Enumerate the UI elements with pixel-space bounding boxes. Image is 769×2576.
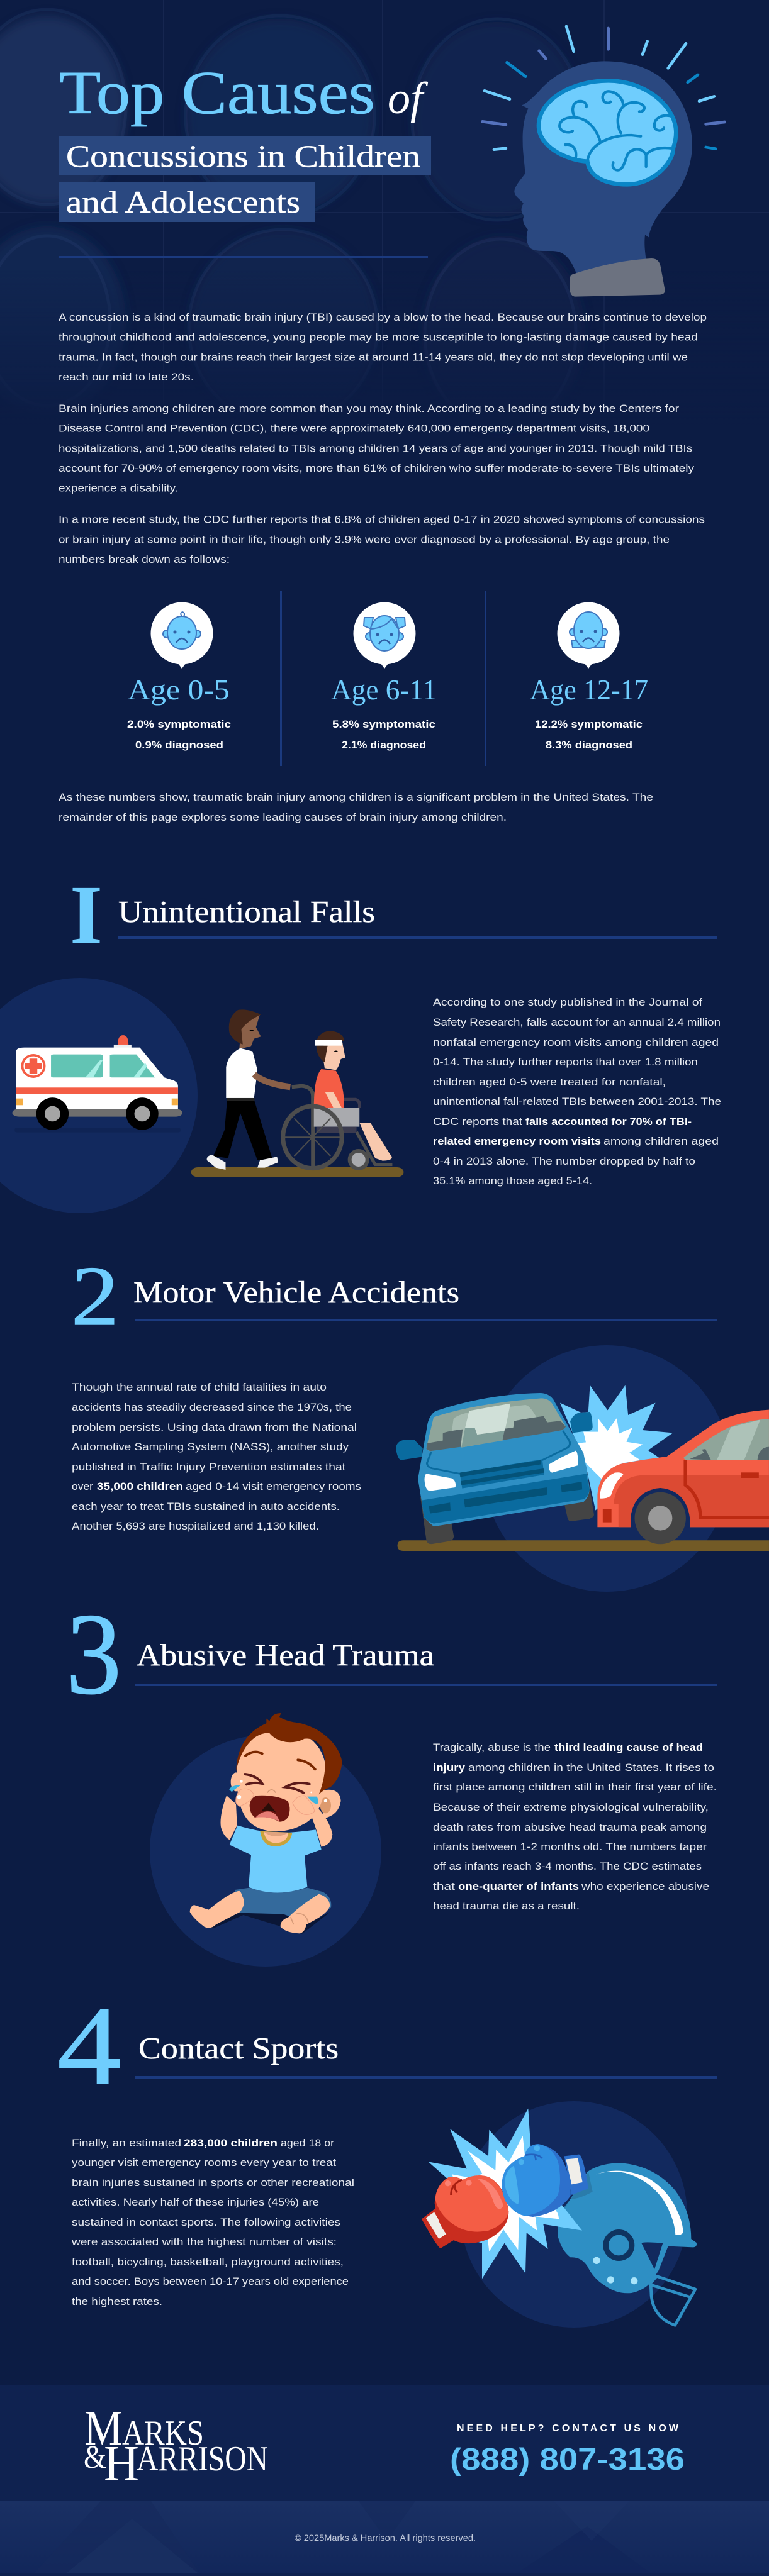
- section 4 text: younger visit emergency rooms every year to treat: [72, 2157, 336, 2168]
- section 4 text: 283,000 children: [184, 2138, 278, 2149]
- impact star: [560, 1385, 673, 1511]
- intro paragraph 1: A concussion is a kind of traumatic brain injury (TBI) caused by a blow to the head. Because our brains continue to develop: [59, 312, 707, 323]
- title: of: of: [388, 73, 429, 123]
- background circle: baby: [150, 1735, 381, 1967]
- hair: [236, 1713, 342, 1794]
- stats panel: age groups: [127, 591, 648, 766]
- helmet: [558, 2163, 697, 2325]
- intro paragraph 3: numbers break down as follows:: [59, 554, 230, 565]
- stat: age 12-17: 8.3% diagnosed: [546, 740, 632, 751]
- section 4 text: football, bicycling, basketball, playground activities,: [72, 2257, 344, 2268]
- ground: [191, 1167, 403, 1177]
- red glove: [422, 2175, 508, 2248]
- illustration: helmet and boxing gloves: [422, 2109, 697, 2325]
- section 2 text: published in Traffic Injury Prevention estimates that: [72, 1462, 345, 1473]
- section 1 text: falls accounted for 70% of TBI-: [525, 1116, 692, 1128]
- section 2 heading: motor vehicle accidents: [71, 1250, 717, 1343]
- man: [207, 1009, 290, 1170]
- intro paragraph 3: [59, 514, 705, 565]
- section 4 text: [71, 2138, 354, 2307]
- section 4 text: aged 18 or: [281, 2138, 335, 2149]
- section 1 text: 0-14. The study further reports that over 1.8 million: [433, 1057, 698, 1068]
- intro paragraph 1: throughout childhood and adolescence, young people may be more susceptible to long-lasting damage caused by head: [59, 332, 698, 343]
- section 4 heading: contact sports: 4: [57, 1983, 121, 2108]
- section 3 text: third leading cause of head: [554, 1742, 703, 1753]
- section 2 text: Another 5,693 are hospitalized and 1,130 killed.: [72, 1521, 319, 1532]
- section 3 text: injury: [433, 1762, 466, 1774]
- shirt: [230, 1826, 322, 1892]
- section 2 text: Though the annual rate of child fatalities in auto: [72, 1382, 327, 1393]
- section 2 text: each year to treat TBIs sustained in auto accidents.: [72, 1501, 340, 1513]
- illustration: car crash: [396, 1385, 769, 1551]
- section 3 text: infants between 1-2 months old. The numbers taper: [433, 1841, 707, 1853]
- transition paragraph: As these numbers show, traumatic brain injury among children is a significant problem in the United States. The: [59, 792, 653, 803]
- section 1 text: among children aged: [603, 1136, 719, 1147]
- section 1 text: children aged 0-5 were treated for nonfatal,: [433, 1077, 666, 1088]
- footer: contact band: [0, 2385, 769, 2501]
- intro paragraph 2: [59, 403, 695, 494]
- background circle: falls: [0, 978, 198, 1213]
- section 1 text: nonfatal emergency room visits among children aged: [433, 1037, 719, 1048]
- head silhouette: [514, 61, 692, 275]
- intro paragraph 2: Disease Control and Prevention (CDC), there were approximately 640,000 emergency department visits, 18,000: [59, 423, 649, 435]
- logo: marks and harrison: M: [84, 2401, 123, 2456]
- stat: age 12-17: 12.2% symptomatic: [535, 719, 643, 730]
- section 3 text: [433, 1742, 717, 1912]
- stat: age 6-11: 2.1% diagnosed: [342, 740, 426, 751]
- hands: [236, 1789, 315, 1814]
- section 4 text: sustained in contact sports. The following activities: [72, 2217, 340, 2228]
- stat: age 12-17: [530, 602, 648, 751]
- icon: teen face: [558, 602, 619, 669]
- section 1 text: unintentional fall-related TBIs between 2001-2013. The: [433, 1096, 721, 1108]
- section 4 text: the highest rates.: [72, 2296, 162, 2307]
- section 2 text: Automotive Sampling System (NASS), another study: [72, 1441, 349, 1453]
- title block: [59, 59, 431, 222]
- illustration: crying baby: [190, 1713, 342, 1934]
- section 4 text: and soccer. Boys between 10-17 years old experience: [72, 2276, 349, 2287]
- section 2 text: problem persists. Using data drawn from the National: [72, 1422, 357, 1433]
- stat: age 6-11: 5.8% symptomatic: [332, 719, 435, 730]
- intro paragraph 2: Brain injuries among children are more common than you may think. According to a leading study by the Centers for: [59, 403, 680, 414]
- rays: [483, 26, 725, 150]
- section 1 text: [433, 997, 721, 1187]
- title box line 2: and Adolescents: [66, 184, 300, 219]
- section 3 text: among children in the United States. It rises to: [468, 1762, 714, 1774]
- stat: age 12-17: Age 12-17: [530, 674, 648, 706]
- tears: [229, 1785, 318, 1804]
- section 2 text: accidents has steadily decreased since the 1970s, the: [72, 1402, 352, 1413]
- title box line 1: Concussions in Children: [66, 138, 420, 174]
- ears: [231, 1772, 241, 1791]
- stat: age 6-11: Age 6-11: [331, 674, 437, 706]
- section 1 heading: unintentional falls: Unintentional Falls: [118, 894, 375, 929]
- logo: marks and harrison: ARRISON: [137, 2440, 268, 2479]
- section 2 text: [72, 1382, 361, 1532]
- illustration: ambulance: [12, 1035, 182, 1133]
- section 4 text: activities. Nearly half of these injuries (45%) are: [72, 2197, 319, 2208]
- section 3 text: who experience abusive: [581, 1881, 709, 1892]
- intro paragraph 3: In a more recent study, the CDC further reports that 6.8% of children aged 0-17 in 2020 showed symptoms of concussions: [59, 514, 705, 526]
- section 2 heading: motor vehicle accidents: 2: [71, 1250, 119, 1343]
- intro paragraph 2: experience a disability.: [59, 483, 178, 494]
- impact star: [429, 2109, 582, 2279]
- collar: [260, 1831, 292, 1846]
- section 3 text: death rates from abusive head trauma peak among: [433, 1822, 707, 1833]
- stat: age 6-11: [331, 602, 437, 751]
- section 1 text: related emergency room visits: [433, 1136, 601, 1147]
- background circle: crash: [483, 1345, 730, 1592]
- section 2 text: 35,000 children: [97, 1481, 183, 1492]
- section 4 text: Finally, an estimated: [72, 2138, 181, 2149]
- wheelchair wheels: [283, 1106, 392, 1169]
- logo: marks and harrison: [84, 2401, 268, 2491]
- section 2 heading: motor vehicle accidents: Motor Vehicle Accidents: [133, 1275, 459, 1309]
- title: top causes: Top Causes: [59, 59, 375, 127]
- logo: marks and harrison: H: [104, 2436, 139, 2491]
- icon: head with brain and impact rays: [483, 26, 725, 297]
- shadow: [206, 1912, 330, 1934]
- collar: [570, 258, 665, 297]
- wheelchair back wheel and frame: [292, 1086, 359, 1168]
- intro paragraph 1: trauma. In fact, though our brains reach their largest size at around 11-14 years old, they do not stop developing until we: [59, 352, 688, 363]
- child: [314, 1031, 392, 1161]
- brain: [539, 80, 676, 184]
- stat: age 0-5: 0.9% diagnosed: [135, 740, 223, 751]
- ground: [398, 1540, 769, 1551]
- brows and eyes: [245, 1752, 315, 1793]
- intro paragraph 2: hospitalizations, and 1,500 deaths related to TBIs among children 14 years of age and younger in 2013. Though mild TBIs: [59, 443, 692, 454]
- stat: age 0-5: 2.0% symptomatic: [127, 719, 231, 730]
- left arm: [221, 1796, 237, 1840]
- section 1 heading: unintentional falls: I: [70, 868, 103, 961]
- transition paragraph: remainder of this page explores some leading causes of brain injury among children.: [59, 812, 507, 823]
- section 1 text: According to one study published in the Journal of: [433, 997, 702, 1008]
- section 1 text: 0-4 in 2013 alone. The number dropped by half to: [433, 1156, 695, 1167]
- icon: child face: [354, 602, 415, 669]
- icon: baby face: [151, 602, 213, 669]
- contact label: NEED HELP? CONTACT US NOW: [457, 2423, 679, 2434]
- stat: age 0-5: [127, 602, 231, 751]
- mouth: [250, 1796, 289, 1822]
- section 3 text: head trauma die as a result.: [433, 1901, 580, 1912]
- footer: copyright band: [0, 2501, 769, 2576]
- blue glove: [502, 2144, 588, 2217]
- section 3 heading: abusive head trauma: 3: [66, 1590, 121, 1719]
- intro paragraph 3: or brain injury at some point in their life, though only 3.9% were ever diagnosed by a professional. By age group, the: [59, 534, 670, 545]
- background circle: sports: [461, 2101, 687, 2328]
- phone number: (888) 807-3136: [450, 2443, 685, 2477]
- section 1 heading: unintentional falls: [70, 868, 717, 961]
- intro paragraph 1: [59, 312, 707, 383]
- transition paragraph: [59, 792, 653, 823]
- logo: marks and harrison: ARKS: [122, 2414, 204, 2453]
- section 3 text: one-quarter of infants: [458, 1881, 579, 1892]
- section 4 heading: contact sports: [57, 1983, 717, 2108]
- intro paragraph 2: account for 70-90% of emergency room visits, more than 61% of children who suffer moderate-to-severe TBIs ultimately: [59, 463, 695, 474]
- red car: [597, 1410, 769, 1544]
- section 3 text: Because of their extreme physiological vulnerability,: [433, 1802, 709, 1813]
- shorts: [235, 1888, 331, 1923]
- right arm: [310, 1807, 332, 1847]
- head: [237, 1728, 326, 1831]
- section 1 text: CDC reports that: [433, 1116, 522, 1128]
- section 3 text: off as infants reach 3-4 months. The CDC estimates: [433, 1861, 702, 1872]
- section 2 text: over: [72, 1481, 94, 1492]
- logo: marks and harrison: &: [84, 2440, 106, 2475]
- section 2 text: aged 0-14 visit emergency rooms: [186, 1481, 361, 1492]
- section 3 text: Tragically, abuse is the: [433, 1742, 551, 1753]
- section 3 heading: abusive head trauma: Abusive Head Trauma: [137, 1638, 434, 1672]
- section 4 text: were associated with the highest number of visits:: [71, 2236, 337, 2248]
- hero background: brain scans: [0, 0, 769, 431]
- section 1 text: Safety Research, falls account for an annual 2.4 million: [433, 1017, 721, 1028]
- section 4 heading: contact sports: Contact Sports: [138, 2031, 339, 2065]
- legs: [190, 1891, 244, 1928]
- section 3 text: that: [433, 1881, 456, 1892]
- section 3 heading: abusive head trauma: [66, 1590, 717, 1719]
- intro paragraph 1: reach our mid to late 20s.: [59, 372, 194, 383]
- section 1 text: 35.1% among those aged 5-14.: [433, 1175, 592, 1187]
- illustration: man pushing child in wheelchair: [191, 1009, 403, 1177]
- section 4 text: brain injuries sustained in sports or other recreational: [72, 2177, 354, 2189]
- blue car: [396, 1393, 594, 1544]
- section 3 text: first place among children still in their first year of life.: [433, 1782, 717, 1793]
- copyright: © 2025Marks & Harrison. All rights reserved.: [295, 2533, 476, 2543]
- stat: age 0-5: Age 0-5: [128, 674, 230, 706]
